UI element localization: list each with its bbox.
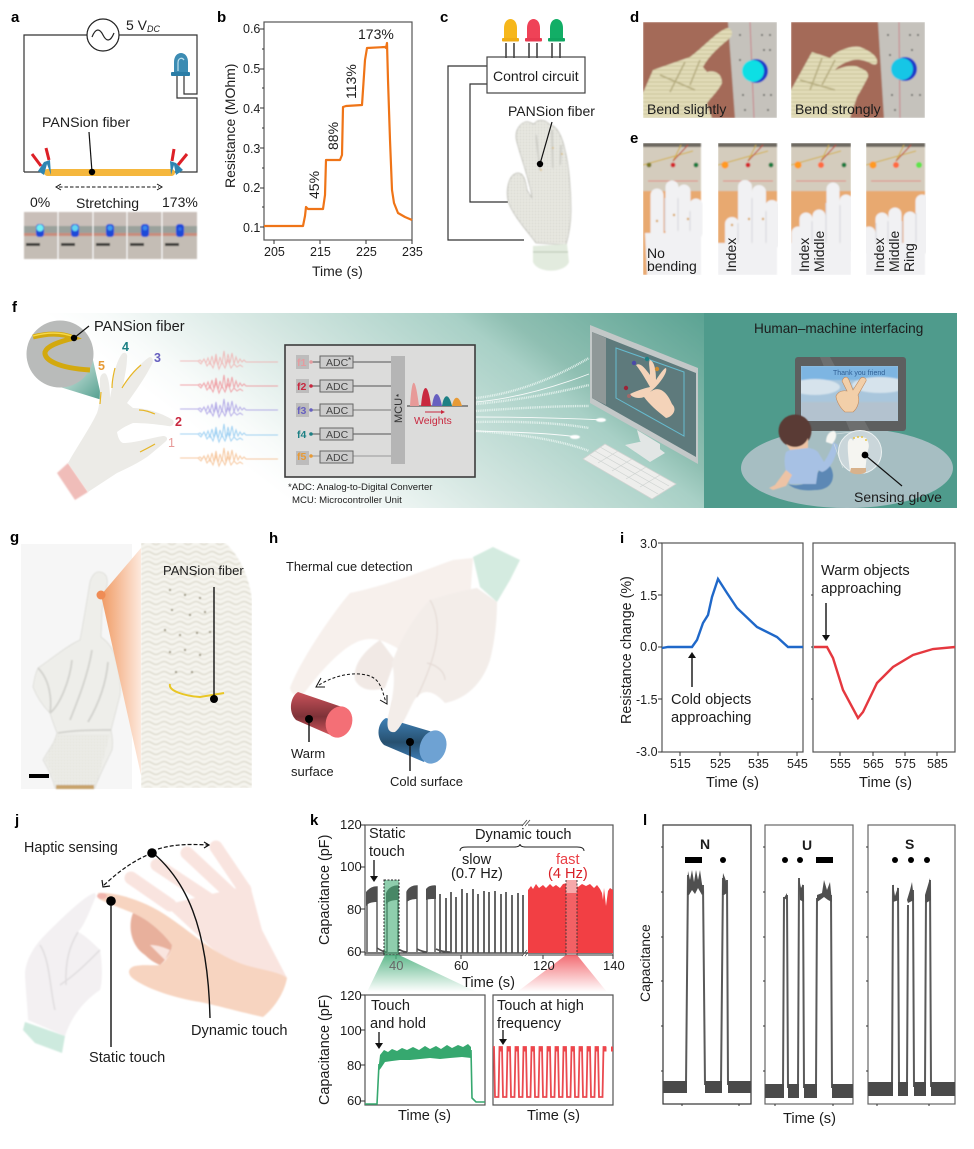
- photo: index middle ring: Index: [871, 238, 887, 272]
- stretch labels: 0%: [30, 194, 50, 210]
- child figure: [769, 414, 838, 490]
- y tick labels: 3.0: [640, 537, 657, 551]
- ticks: [260, 29, 412, 244]
- chart U: [763, 825, 853, 1106]
- circuit wires: [24, 35, 197, 172]
- MCU bar: MCU: [393, 398, 405, 423]
- x tick labels: 215: [310, 245, 331, 259]
- fiber leader line: [537, 122, 552, 167]
- stream sparks: [570, 418, 606, 439]
- control circuit box: [487, 57, 585, 93]
- tablet: [790, 357, 908, 431]
- static highlight box: [384, 880, 399, 955]
- weights distribution: [407, 383, 468, 406]
- footnote: [288, 482, 433, 506]
- label a: a: [11, 9, 20, 26]
- fiber label: PANSion fiber: [163, 563, 244, 578]
- glove fist: [33, 572, 120, 789]
- chart U: U: [802, 837, 812, 853]
- fiber label: PANSion fiber: [508, 103, 595, 119]
- icon: blue LED: [171, 53, 190, 76]
- warm cylinder: [291, 692, 357, 741]
- row f1: [296, 355, 391, 369]
- x axis titles: Time (s): [706, 775, 759, 791]
- on-screen peace hand: [836, 377, 866, 412]
- green label: Touch: [371, 998, 410, 1014]
- fast label: (4 Hz): [548, 866, 588, 882]
- label c: c: [440, 9, 448, 26]
- slow label: [451, 852, 503, 882]
- x tick labels: 565: [863, 757, 884, 771]
- right axes: [813, 543, 955, 752]
- y tick labels: [636, 537, 658, 759]
- panel d: bending photos: [630, 9, 925, 118]
- warm label: Warm objects: [821, 563, 910, 579]
- lower y labels: 60: [347, 1093, 361, 1108]
- y tick labels: -1.5: [636, 693, 658, 707]
- slow touch spikes: [440, 889, 523, 953]
- MCU bar: *: [395, 394, 404, 397]
- white glove: [23, 893, 102, 1053]
- panel l: Morse letters: [637, 812, 955, 1127]
- top y labels: 60: [347, 944, 361, 959]
- label j: j: [14, 812, 19, 829]
- footnote: *ADC: Analog-to-Digital Converter: [288, 482, 433, 493]
- cold arrow: [688, 652, 696, 687]
- heading: Haptic sensing: [24, 840, 118, 856]
- x tick labels: 205: [264, 245, 285, 259]
- y axis title: Resistance change (%): [619, 576, 635, 724]
- static touch label: Static: [369, 826, 406, 842]
- MCU bar: [391, 356, 405, 464]
- caption: bend strongly: Bend strongly: [795, 101, 881, 117]
- static arrow: [370, 860, 378, 882]
- finger numbers: 4: [122, 340, 129, 354]
- strain labels: [306, 26, 394, 199]
- arc arrow: [316, 674, 387, 704]
- x axis title: Time (s): [783, 1111, 836, 1127]
- chart N: [661, 825, 751, 1106]
- photo: index middle: [791, 143, 851, 275]
- row f3: ADC: [326, 405, 349, 417]
- cold curve: [662, 579, 803, 648]
- cold cylinder: [378, 718, 451, 767]
- row f1: ADC: [326, 357, 349, 369]
- red label: [497, 998, 584, 1032]
- row f3: f3: [297, 405, 306, 417]
- fiber label: PANSion fiber: [94, 319, 185, 335]
- strain labels: 173%: [358, 26, 394, 42]
- control circuit box: Control circuit: [493, 68, 579, 84]
- orange marker: [96, 590, 106, 600]
- top y title: Capacitance (pF): [317, 835, 333, 945]
- cold label: approaching: [671, 710, 751, 726]
- stretching arrow: [56, 184, 162, 190]
- y axis title: Capacitance: [637, 924, 653, 1002]
- fast touch block: [528, 883, 613, 953]
- row f4: f4: [297, 429, 306, 441]
- bright stream lines: [476, 374, 605, 437]
- x tick labels: 235: [402, 245, 423, 259]
- red label: Touch at high: [497, 998, 584, 1014]
- label g: g: [10, 529, 19, 546]
- row f5: ADC: [326, 452, 349, 464]
- label e: e: [630, 130, 638, 147]
- sensing glove leader: [862, 452, 902, 486]
- left photo background: [21, 544, 132, 789]
- x tick labels: 585: [927, 757, 948, 771]
- top ticks: [361, 825, 613, 959]
- photo: index: [718, 143, 777, 275]
- floor ellipse: [741, 428, 953, 508]
- top y labels: [340, 817, 362, 959]
- top x labels: [389, 958, 625, 973]
- lower y title: Capacitance (pF): [317, 995, 333, 1105]
- photo: index middle ring: Ring: [901, 243, 917, 272]
- top x labels: 60: [454, 958, 468, 973]
- glove inset: [834, 430, 882, 474]
- y tick labels: 0.1: [243, 221, 260, 235]
- icon: right clip: [170, 149, 187, 175]
- row f5: [296, 451, 391, 465]
- fiber leader line: [89, 132, 95, 175]
- finger numbers: 2: [175, 415, 182, 429]
- x tick labels: 535: [748, 757, 769, 771]
- icon: red LED: [525, 19, 542, 58]
- monitor: [590, 325, 698, 464]
- label b: b: [217, 9, 226, 26]
- fast label: fast: [556, 852, 580, 868]
- stretch labels: [30, 194, 198, 211]
- chart S: [866, 825, 955, 1106]
- row f2: [296, 379, 391, 393]
- top y labels: 80: [347, 902, 361, 917]
- fiber label: PANSion fiber: [42, 115, 130, 131]
- top axes: [365, 820, 613, 958]
- lower y labels: 120: [340, 988, 362, 1003]
- red square wave: [493, 1047, 613, 1097]
- panel a: stretching circuit: [11, 9, 198, 259]
- glove photo: [507, 120, 571, 271]
- green trace: [365, 1044, 485, 1104]
- ticks: [658, 543, 937, 756]
- inset wedge: [60, 360, 102, 400]
- strain labels: 88%: [325, 122, 341, 150]
- static touch marker: [106, 896, 116, 1047]
- green arrow: [375, 1032, 383, 1049]
- heading: Thermal cue detection: [286, 559, 413, 574]
- icon: voltage source: [87, 19, 119, 51]
- row f2: f2: [297, 381, 306, 393]
- finger numbers: 3: [154, 351, 161, 365]
- warm curve: [814, 647, 955, 718]
- cold label: [671, 692, 751, 726]
- green zoom fan: [367, 955, 477, 992]
- photo: no bending: No: [647, 245, 665, 261]
- stretch labels: 173%: [162, 194, 198, 210]
- label k: k: [310, 812, 319, 829]
- caption: Sensing glove: [854, 489, 942, 505]
- static touch label: Static touch: [89, 1050, 165, 1066]
- y tick labels: [243, 22, 260, 235]
- lower y labels: [340, 988, 362, 1108]
- row f4: ADC: [326, 429, 349, 441]
- axes: [264, 22, 412, 240]
- wires: [448, 66, 524, 240]
- chart N: N: [700, 836, 710, 852]
- x tick labels: 555: [830, 757, 851, 771]
- fingertip over cold cylinder: [387, 700, 407, 732]
- lower y labels: 80: [347, 1058, 361, 1073]
- y tick labels: 0.6: [243, 22, 260, 36]
- dynamic touch marker: [147, 848, 210, 1018]
- panel k: capacitance charts: [310, 812, 625, 1124]
- gradient background: [17, 313, 704, 508]
- panel g: fiber on glove photo: [10, 529, 252, 789]
- photo: index middle ring: Middle: [886, 231, 902, 272]
- cold label: Cold surface: [390, 774, 463, 789]
- PANSion fiber: [44, 169, 175, 176]
- weights arrow and label: Weights: [414, 415, 452, 427]
- fiber leader: [210, 587, 218, 703]
- resistance curve: [264, 43, 412, 226]
- lower left axes: [365, 995, 485, 1105]
- photo: no bending: bending: [647, 258, 697, 274]
- label d: d: [630, 9, 639, 26]
- panel f: signal processing and human-machine interface: [12, 299, 957, 508]
- finger numbers: [98, 340, 182, 450]
- waveform 3: [180, 399, 278, 417]
- fast label: [548, 852, 588, 882]
- icon: yellow LED: [502, 19, 519, 58]
- warm label: Warm: [291, 746, 325, 761]
- label h: h: [269, 530, 278, 547]
- warm marker: [305, 715, 313, 742]
- y tick labels: 0.3: [243, 142, 260, 156]
- waveform 2: [180, 375, 278, 393]
- heading: Human–machine interfacing: [754, 321, 923, 336]
- photo: bend slightly: [643, 22, 777, 118]
- row f3: [296, 403, 391, 417]
- lower right axes: [493, 995, 613, 1105]
- y tick labels: 0.0: [640, 640, 657, 654]
- waveform 1: [180, 351, 278, 369]
- finger numbers: 1: [168, 436, 175, 450]
- footnote: MCU: Microcontroller Unit: [292, 495, 402, 506]
- top y labels: 100: [340, 859, 362, 874]
- knit close-up photo: [141, 543, 252, 788]
- icon: left clip: [32, 148, 51, 175]
- label i: i: [620, 530, 624, 547]
- scale bar: [29, 774, 49, 778]
- voltage label: DC: [147, 24, 161, 34]
- x title lower right: Time (s): [527, 1108, 580, 1124]
- lower left ticks: [361, 995, 365, 1101]
- row f5: f5: [297, 451, 306, 463]
- x tick labels: 515: [670, 757, 691, 771]
- label l: l: [643, 812, 647, 829]
- top y labels: 120: [340, 817, 362, 832]
- x tick labels: 525: [710, 757, 731, 771]
- green label: [370, 998, 426, 1032]
- x axis titles: Time (s): [859, 775, 912, 791]
- photo: no bending: [643, 143, 701, 275]
- y tick labels: 0.5: [243, 62, 260, 76]
- x tick labels: 575: [895, 757, 916, 771]
- glove illustration: [57, 353, 174, 500]
- x tick labels: 545: [787, 757, 808, 771]
- red label: frequency: [497, 1016, 562, 1032]
- static touch label: touch: [369, 844, 405, 860]
- bare hand: [97, 893, 287, 1017]
- data streams: [476, 358, 589, 451]
- panel e: finger bending photos: [630, 130, 925, 275]
- top x labels: 40: [389, 958, 403, 973]
- label f: f: [12, 299, 18, 316]
- glove hand: [290, 547, 520, 732]
- row f1: *: [348, 356, 351, 365]
- tablet caption: Thank you friend: [833, 370, 885, 377]
- finger numbers: 5: [98, 359, 105, 373]
- static touch label: [369, 826, 406, 860]
- x tick labels: 225: [356, 245, 377, 259]
- top x title: Time (s): [462, 975, 515, 991]
- panel c: glove and LEDs: [440, 9, 595, 271]
- brace: [460, 844, 584, 851]
- keyboard: [583, 444, 676, 499]
- chart S: S: [905, 836, 914, 852]
- x title lower left: Time (s): [398, 1108, 451, 1124]
- lower y labels: 100: [340, 1023, 362, 1038]
- LED photo strip: [24, 212, 197, 259]
- panel h: thermal cue detection: [269, 530, 520, 789]
- y tick labels: 0.2: [243, 181, 260, 195]
- green label: and hold: [370, 1016, 426, 1032]
- y tick labels: 1.5: [640, 589, 657, 603]
- photo: bend strongly: [791, 22, 925, 118]
- dynamic touch label: Dynamic touch: [191, 1023, 288, 1039]
- photo: index middle ring: [866, 143, 925, 275]
- fiber leader: [71, 326, 89, 341]
- panel j: haptic sensing: [14, 812, 288, 1066]
- y tick labels: 0.4: [243, 102, 260, 116]
- stretch labels: Stretching: [76, 195, 139, 211]
- cold label: Cold objects: [671, 692, 751, 708]
- yellow fiber: [170, 684, 224, 697]
- row f2: ADC: [326, 381, 349, 393]
- photo: index: Index: [723, 238, 739, 272]
- caption: bend slightly: Bend slightly: [647, 101, 726, 117]
- warm label: [821, 563, 910, 597]
- warm arrow: [822, 603, 830, 641]
- row f1: f1: [297, 357, 306, 369]
- waveforms: [180, 351, 278, 466]
- panel i: thermal response charts: [619, 530, 955, 791]
- warm label: surface: [291, 764, 334, 779]
- top x labels: 140: [603, 958, 625, 973]
- strain labels: 45%: [306, 171, 322, 199]
- waveform 5: [180, 448, 278, 466]
- row f4: [297, 428, 391, 441]
- icon: green LED: [548, 19, 565, 58]
- right panel: human-machine interfacing: [704, 313, 957, 508]
- slow label: slow: [462, 852, 492, 868]
- dynamic touch label: Dynamic touch: [475, 827, 572, 843]
- arc arrow: [102, 842, 209, 887]
- ghost fingers: [131, 847, 287, 978]
- y tick labels: -3.0: [636, 745, 658, 759]
- strain labels: 113%: [343, 64, 359, 99]
- x axis title: Time (s): [312, 263, 363, 279]
- x tick labels: [670, 757, 948, 771]
- slow label: (0.7 Hz): [451, 866, 503, 882]
- processing block diagram: [285, 345, 475, 477]
- red arrow: [499, 1030, 507, 1045]
- warm label: approaching: [821, 581, 901, 597]
- cold marker: [406, 738, 414, 771]
- top x labels: 120: [533, 958, 555, 973]
- voltage label: 5 V: [126, 17, 147, 33]
- photo: index middle: Index: [796, 238, 812, 272]
- fast highlight box: [566, 880, 577, 955]
- orange zoom wedge: [101, 548, 141, 775]
- panel b: resistance chart: [217, 9, 423, 279]
- red zoom fan: [517, 955, 607, 992]
- left axes: [662, 543, 803, 752]
- static touch pulses: [365, 886, 612, 953]
- y axis title: Resistance (MOhm): [222, 64, 238, 188]
- inset circle with fiber: [26, 320, 94, 388]
- raised glove: [826, 431, 836, 444]
- x axis titles: [706, 775, 912, 791]
- warm label: [291, 746, 334, 779]
- waveform 4: [180, 424, 278, 442]
- on-screen hand: [624, 357, 674, 418]
- x tick labels: [264, 245, 423, 259]
- photo: index middle: Middle: [811, 231, 827, 272]
